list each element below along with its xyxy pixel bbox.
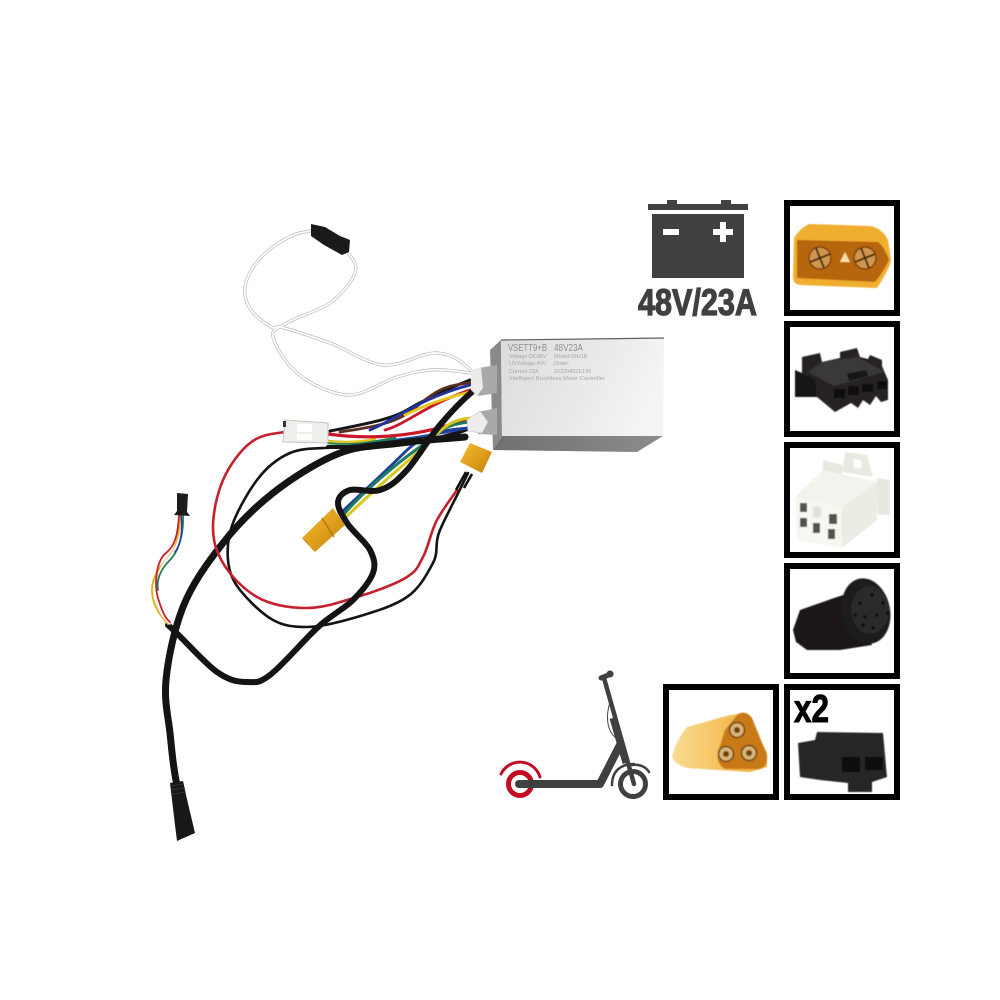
battery icon <box>648 200 748 278</box>
small four-wire lead with plug <box>152 493 190 624</box>
white tape, lower <box>467 411 488 433</box>
label text on controller: Model:09U1B <box>554 354 588 360</box>
label text on controller <box>508 343 605 382</box>
cable bundle to controller <box>328 380 470 516</box>
white six-pin connector <box>283 420 328 443</box>
label text on controller: Order: <box>554 361 570 367</box>
panel: white six-pin connector <box>787 445 897 555</box>
label text on controller: VSETT9+B <box>508 343 547 354</box>
panel: black plug x2 <box>787 687 897 797</box>
panel: yellow three-pin motor connector <box>666 687 776 797</box>
red cable loop <box>213 432 457 608</box>
icon: scooter with rear wheel highlighted <box>501 670 649 796</box>
panel: black four-pin connector <box>787 324 897 434</box>
panel: yellow XT60 connector <box>787 203 897 313</box>
label text on controller: 48V23A <box>554 343 583 354</box>
thin black cable loop <box>228 437 468 627</box>
icon: black two-pin plug <box>311 224 350 255</box>
quantity label: x2 <box>794 688 829 731</box>
label text on controller: 20230402E196 <box>554 369 591 375</box>
label text on controller: Voltage:DC48V <box>509 354 547 360</box>
second thick black cable <box>168 392 472 682</box>
rear wheel highlight <box>501 762 540 796</box>
battery rating: 48V/23A <box>638 282 757 323</box>
label text on controller: Current:23A <box>509 369 539 375</box>
gold bullet connector <box>302 508 345 552</box>
motor plug <box>170 781 195 841</box>
white tape, upper <box>471 367 483 396</box>
controller box <box>467 338 664 452</box>
label text on controller: UVVoltage:40V <box>509 361 547 367</box>
panel: black round multi-pin plug <box>787 566 897 676</box>
label text on controller: Intelligent Brushless Motor Controller <box>509 376 605 382</box>
thick black motor cable <box>165 437 465 785</box>
white wire harness with black connector <box>245 224 473 395</box>
gold power connector with leads <box>456 443 492 490</box>
icon: small black plug <box>174 493 190 516</box>
